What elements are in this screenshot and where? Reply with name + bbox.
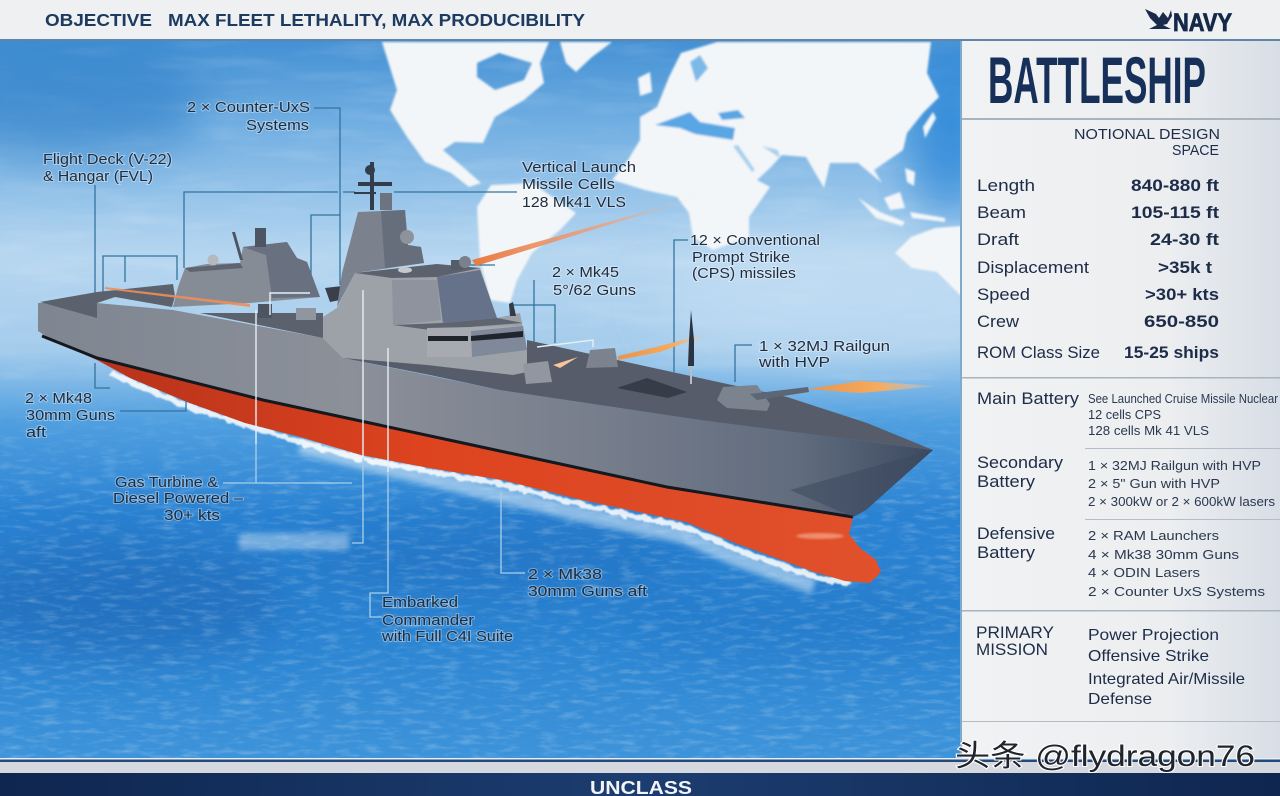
specs table: Displacement bbox=[977, 258, 1089, 277]
callout: flight deck: Flight Deck (V-22) bbox=[43, 151, 172, 168]
battleship illustration bbox=[38, 162, 940, 586]
navy logo: NAVY bbox=[1173, 9, 1232, 37]
specs table: >30+ kts bbox=[1145, 286, 1219, 304]
specs table: Draft bbox=[977, 230, 1019, 249]
defensive battery: Defensive bbox=[977, 525, 1055, 543]
mediterranean bbox=[655, 112, 735, 140]
callout: embarked commander: Commander bbox=[382, 612, 474, 629]
mast bbox=[354, 162, 414, 244]
specs table: 15-25 ships bbox=[1124, 344, 1219, 362]
callout: propulsion: Diesel Powered – bbox=[113, 490, 244, 507]
main battery: 12 cells CPS bbox=[1088, 407, 1161, 422]
specs table: Crew bbox=[977, 312, 1020, 331]
defensive battery: 2 × Counter UxS Systems bbox=[1088, 584, 1266, 599]
secondary battery: Battery bbox=[977, 473, 1036, 491]
specs table: Length bbox=[977, 176, 1035, 195]
specs table: >35k t bbox=[1158, 259, 1213, 277]
specs table: 105-115 ft bbox=[1131, 204, 1220, 222]
callout: Mk38: 2 × Mk38 bbox=[528, 566, 602, 583]
aft mast and sensors bbox=[208, 228, 342, 320]
defensive battery: Battery bbox=[977, 544, 1036, 562]
defensive battery bbox=[977, 525, 1266, 599]
secondary battery: 2 × 300kW or 2 × 600kW lasers bbox=[1088, 494, 1276, 509]
navy logo bbox=[1145, 9, 1232, 37]
blurred erased label bbox=[239, 533, 349, 550]
bottom classification bar bbox=[0, 758, 1280, 796]
bulb highlight bbox=[796, 533, 844, 539]
forward laser beam bbox=[472, 195, 705, 266]
main battery: Main Battery bbox=[977, 390, 1080, 408]
callout: CPS: (CPS) missiles bbox=[692, 265, 796, 282]
panel subtitle: NOTIONAL DESIGN bbox=[1074, 126, 1220, 143]
black waterline bbox=[42, 336, 853, 517]
callout: CPS: 12 × Conventional bbox=[690, 232, 820, 249]
callout: counter-UxS: 2 × Counter-UxS bbox=[187, 99, 310, 116]
forward sensors bbox=[398, 256, 516, 316]
secondary battery bbox=[977, 454, 1276, 509]
primary mission: MISSION bbox=[976, 641, 1048, 659]
greenland bbox=[560, 42, 612, 72]
callout: flight deck: & Hangar (FVL) bbox=[43, 168, 153, 185]
primary mission: Offensive Strike bbox=[1088, 648, 1209, 665]
forward deck bbox=[343, 340, 933, 450]
main battery bbox=[977, 390, 1279, 438]
south america bbox=[477, 183, 576, 303]
objective statement: MAX FLEET LETHALITY, MAX PRODUCIBILITY bbox=[168, 10, 585, 30]
specs table: 650-850 bbox=[1144, 313, 1219, 331]
5 inch gun aft bbox=[586, 331, 717, 368]
defensive battery: 2 × RAM Launchers bbox=[1088, 528, 1220, 543]
callout: Mk48: aft bbox=[26, 424, 47, 441]
top header bar bbox=[0, 0, 1280, 41]
callout: propulsion: Gas Turbine & bbox=[115, 474, 218, 491]
callout: embarked commander: with Full C4I Suite bbox=[381, 628, 513, 645]
specs table: Speed bbox=[977, 285, 1030, 304]
secondary battery: 2 × 5" Gun with HVP bbox=[1088, 476, 1220, 491]
wake foam bbox=[110, 373, 850, 584]
panel subtitle: SPACE bbox=[1172, 142, 1219, 159]
wake foam spray bbox=[300, 446, 814, 586]
aft superstructure bbox=[173, 242, 320, 307]
leader lines over ship bbox=[95, 290, 593, 617]
defensive battery: 4 × Mk38 30mm Guns bbox=[1088, 547, 1240, 562]
black sea bbox=[718, 110, 745, 120]
callout: Mk38: 30mm Guns aft bbox=[528, 583, 648, 600]
railgun muzzle flash bbox=[808, 381, 940, 393]
callout: embarked commander: Embarked bbox=[382, 594, 458, 611]
callout: Mk45: 2 × Mk45 bbox=[552, 264, 619, 281]
aft laser beam bbox=[105, 287, 250, 307]
callout: Mk48: 30mm Guns bbox=[26, 407, 115, 424]
main tower bbox=[337, 210, 424, 307]
australia bbox=[895, 226, 962, 297]
callout: VLS: Missile Cells bbox=[522, 176, 615, 193]
callout: VLS: 128 Mk41 VLS bbox=[522, 194, 626, 211]
red lower hull bbox=[40, 335, 881, 583]
gray hull side bbox=[38, 303, 933, 517]
world map bbox=[382, 42, 962, 303]
callout: Mk48: 2 × Mk48 bbox=[25, 390, 92, 407]
CPS missile cells bbox=[617, 378, 687, 398]
primary mission: PRIMARY bbox=[976, 624, 1054, 642]
watermark: 头条 @flydragon76 bbox=[955, 740, 1255, 773]
primary mission: Power Projection bbox=[1088, 627, 1219, 644]
specs table: 840-880 ft bbox=[1131, 177, 1220, 195]
objective heading: OBJECTIVE bbox=[45, 10, 152, 30]
bow shadow bbox=[790, 450, 933, 517]
aft deck bbox=[40, 284, 175, 318]
main superstructure block bbox=[323, 265, 527, 375]
main battery: 128 cells Mk 41 VLS bbox=[1088, 423, 1209, 438]
railgun turret bbox=[717, 385, 809, 411]
5 inch gun forward bbox=[523, 357, 578, 384]
panel: specifications bbox=[960, 41, 1280, 759]
CPS missile bbox=[688, 310, 694, 366]
north america bbox=[382, 42, 549, 187]
secondary battery: 1 × 32MJ Railgun with HVP bbox=[1088, 458, 1261, 473]
specs table: 24-30 ft bbox=[1150, 231, 1220, 249]
specs table: Beam bbox=[977, 203, 1026, 222]
callout: Mk45: 5°/62 Guns bbox=[553, 282, 636, 299]
specs table: ROM Class Size bbox=[977, 343, 1100, 362]
callout: railgun: with HVP bbox=[758, 354, 830, 371]
leader lines behind ship bbox=[95, 108, 752, 382]
secondary battery: Secondary bbox=[977, 454, 1064, 472]
callout: propulsion: 30+ kts bbox=[164, 507, 220, 524]
primary mission: Integrated Air/Missile bbox=[1088, 671, 1245, 688]
red sea and gulf bbox=[733, 145, 780, 172]
bridge bbox=[427, 326, 527, 357]
primary mission: Defense bbox=[1088, 691, 1152, 708]
baltic bbox=[690, 55, 708, 82]
afro-eurasia bbox=[612, 42, 939, 250]
primary mission bbox=[976, 624, 1245, 708]
specs table bbox=[977, 176, 1220, 362]
callout: VLS: Vertical Launch bbox=[522, 159, 636, 176]
uk and japan islands bbox=[638, 72, 936, 138]
callout: counter-UxS: Systems bbox=[246, 117, 309, 134]
indonesia bbox=[858, 168, 945, 226]
callout: railgun: 1 × 32MJ Railgun bbox=[759, 338, 890, 355]
ocean background bbox=[0, 40, 1000, 760]
defensive battery: 4 × ODIN Lasers bbox=[1088, 565, 1201, 580]
callout: CPS: Prompt Strike bbox=[692, 249, 790, 266]
